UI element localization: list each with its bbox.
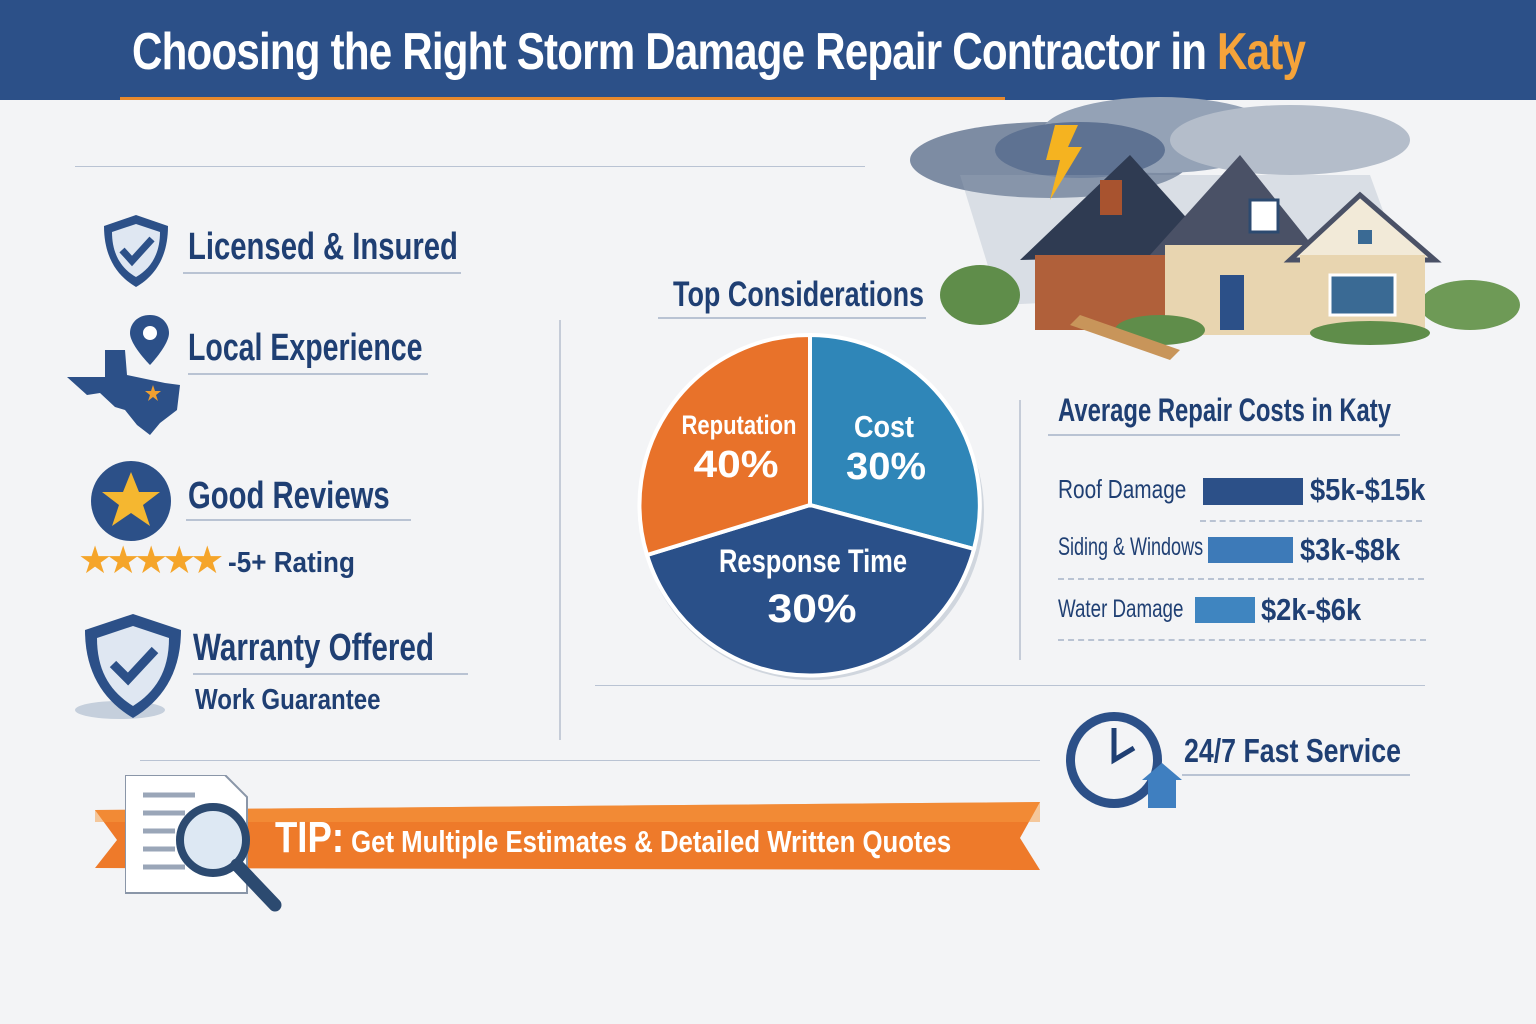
header band — [0, 0, 1536, 100]
pie chart: Cost — [854, 409, 914, 444]
panel: average repair costs — [1048, 392, 1426, 641]
bar: roof: Roof Damage — [1058, 474, 1186, 504]
text: 24/7 Fast Service — [1184, 732, 1401, 769]
title: Choosing the Right Storm Damage Repair Contractor in Katy — [132, 23, 1305, 81]
icon: shield — [75, 614, 181, 719]
item: local experience — [67, 315, 428, 435]
text: Local Experience — [188, 327, 422, 369]
fast service — [1066, 712, 1410, 808]
icon: texas map pin — [67, 315, 180, 435]
panel: average repair costs: $3k-$8k — [1300, 532, 1400, 567]
panel: average repair costs: $2k-$6k — [1261, 592, 1361, 627]
pie chart: 30% — [768, 587, 856, 631]
heading: top considerations: Top Considerations — [673, 275, 924, 314]
pie chart — [638, 333, 984, 680]
pie chart: Reputation — [682, 410, 796, 440]
bar: siding: Siding & Windows — [1058, 533, 1203, 561]
icon: document with magnifier — [125, 775, 282, 912]
icon: star badge — [91, 461, 171, 541]
tip text: TIP: Get Multiple Estimates & Detailed Written Quotes — [275, 813, 951, 862]
rating stars: ★★★★★ — [78, 540, 218, 582]
text: Good Reviews — [188, 475, 390, 517]
icon: shield check — [104, 215, 168, 287]
house illustration — [910, 97, 1520, 360]
item: warranty offered: Work Guarantee — [195, 684, 380, 716]
item: good reviews: -5+ Rating — [228, 547, 355, 579]
item: warranty offered — [75, 614, 468, 719]
pie chart: 40% — [694, 444, 778, 486]
item: licensed & insured — [104, 215, 461, 287]
text: Licensed & Insured — [188, 226, 458, 268]
item: good reviews — [78, 461, 411, 582]
pie chart: Response Time — [719, 543, 907, 579]
pie chart: 30% — [846, 446, 926, 488]
bar: water: Water Damage — [1058, 595, 1183, 623]
text: Warranty Offered — [193, 627, 434, 669]
tip banner — [95, 775, 1040, 912]
heading: Average Repair Costs in Katy — [1058, 392, 1391, 428]
icon: clock — [1066, 712, 1182, 808]
panel: average repair costs: $5k-$15k — [1310, 472, 1425, 507]
